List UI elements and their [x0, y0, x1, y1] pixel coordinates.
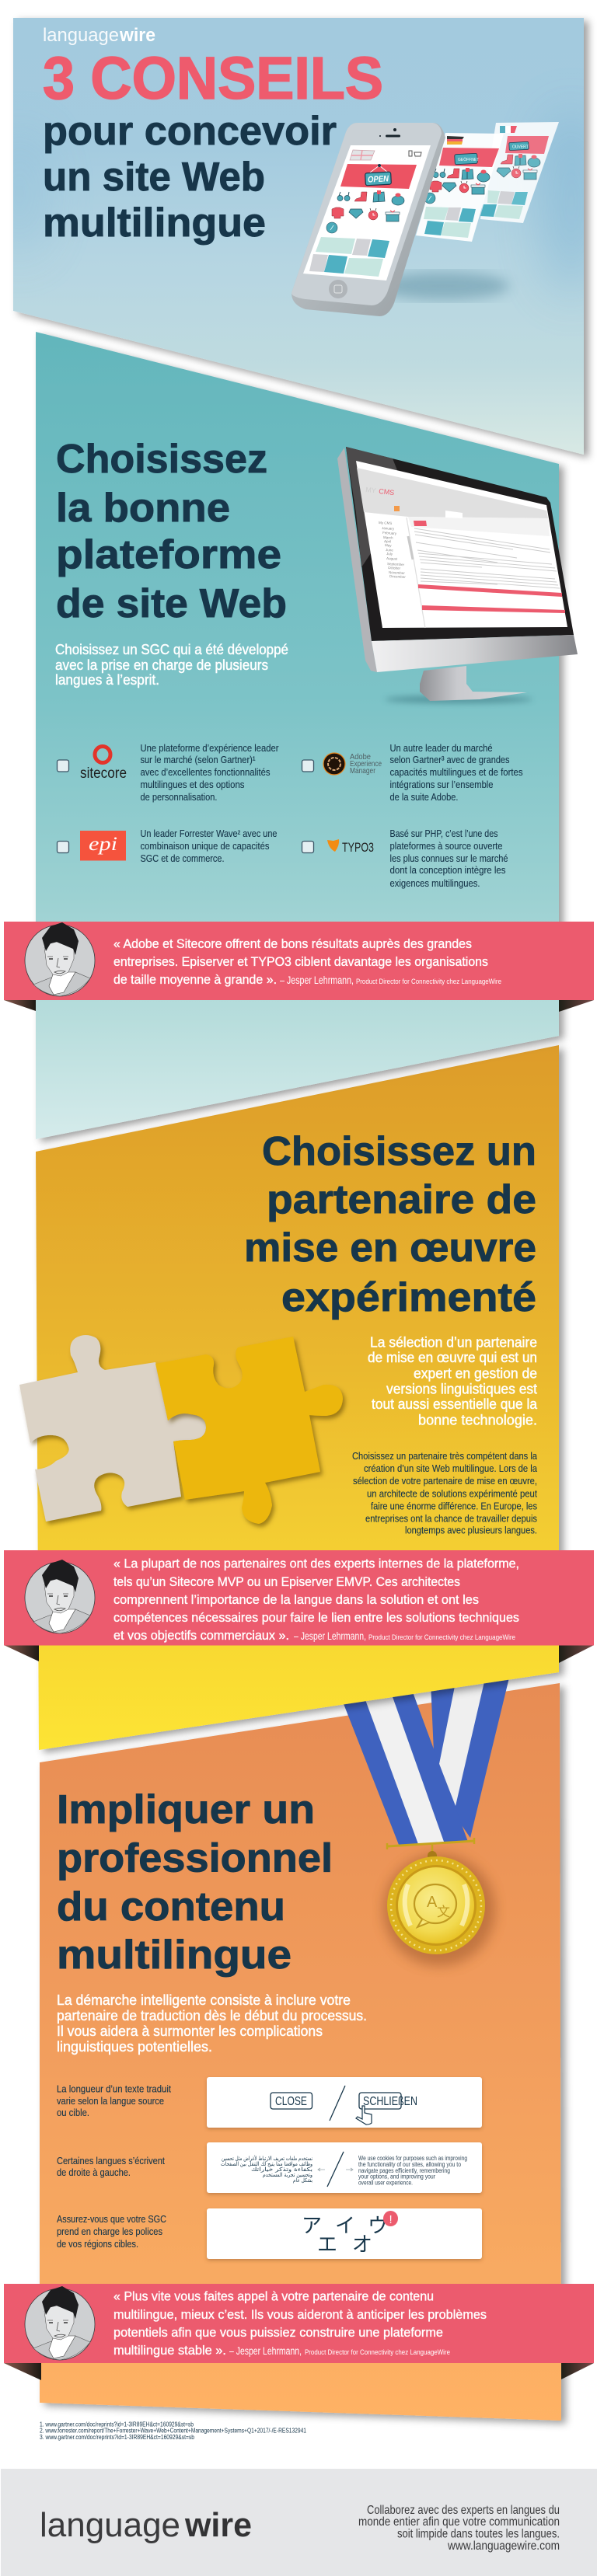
quote text: Product Director for Connectivity chez LanguageWire — [305, 2348, 450, 2357]
ribbon folds — [4, 2363, 594, 2380]
quote text: entreprises. Episerver et TYPO3 ciblent davantage les organisations — [113, 955, 488, 969]
text: Episerver: Un leader Forrester Wave² avec une — [140, 828, 278, 839]
ribbon band — [4, 922, 594, 1000]
tip 1 heading: plateforme — [56, 532, 281, 577]
tip 1 intro text: Choisissez un SGC qui a été développé — [55, 642, 288, 657]
tip 3 intro text: Il vous aidera à surmonter les complications — [57, 2024, 323, 2039]
tip 2 body text: entreprises ont la chance de travailler depuis — [365, 1514, 537, 1525]
tip 2 body text: création d’un site Web multilingue. Lors de la — [364, 1463, 537, 1474]
tip 2 body text: Choisissez un partenaire très compétent dans la — [352, 1451, 537, 1462]
text: TYPO3 — [390, 828, 508, 889]
item: Sitecore — [58, 743, 278, 803]
card: katakana glyphs: ウ — [368, 2214, 388, 2237]
CMS sidebar tree: October — [388, 566, 401, 570]
footer logo: wire — [184, 2506, 252, 2544]
ribbon band — [4, 2284, 594, 2363]
card: close button comparison — [207, 2077, 482, 2128]
front phone — [292, 123, 445, 316]
tip 3 heading: Impliquer un — [57, 1787, 315, 1832]
checkbox — [58, 841, 68, 853]
header background — [13, 18, 584, 455]
text: font support — [57, 2214, 166, 2250]
tip 3 intro text: La démarche intelligente consiste à inclure votre — [57, 1992, 351, 2008]
quote text: potentiels afin que vous puissiez construire une plateforme — [113, 2326, 443, 2340]
item: TYPO3 — [302, 828, 508, 889]
text: Sitecore: avec d’excellentes fonctionnalités — [140, 767, 271, 778]
logo: Sitecore — [80, 746, 127, 782]
card: arabic and english text: your options, and improving your — [358, 2173, 435, 2180]
tip 2 intro text: de mise en œuvre qui est un — [368, 1350, 537, 1365]
quote text: multilingue, mieux c’est. Ils vous aideront à anticiper les problèmes — [113, 2308, 487, 2322]
logo: Adobe Experience Manager: Adobe — [350, 752, 371, 762]
footer text: soit limpide dans toutes les langues. — [397, 2528, 560, 2541]
tip 3 heading — [57, 1787, 333, 1978]
text: Adobe: de la suite Adobe. — [390, 792, 459, 803]
quote text — [113, 2290, 487, 2358]
text: right to left — [57, 2156, 165, 2178]
footer logo — [40, 2506, 252, 2544]
tip 2 intro text: tout aussi essentielle que la — [372, 1396, 538, 1412]
header tint — [0, 109, 597, 295]
card: katakana glyphs: イ — [335, 2214, 355, 2237]
rear page: French — [480, 122, 559, 223]
footnotes: 1. www.gartner.com/doc/reprints?id=1-3IR89EH&ct=160929&st=sb — [40, 2421, 194, 2428]
CMS sidebar tree: May — [385, 543, 392, 547]
text: Episerver: SGC et de commerce. — [140, 853, 224, 864]
subtitle: multilingue — [43, 200, 266, 246]
card: arabic and english text: وظائف مواقعنا مما يتيح لك التنقل بين الصفحات — [221, 2161, 312, 2167]
tip 3 background — [40, 1683, 561, 2421]
tip 3 heading: du contenu — [57, 1884, 285, 1929]
tip 2 body text — [352, 1451, 537, 1535]
subtitle — [43, 109, 337, 246]
card: arabic and english text — [207, 2142, 482, 2193]
CMS sidebar tree: January — [382, 526, 395, 531]
tip 3 heading: professionnel — [57, 1835, 333, 1881]
text: Episerver: combinaison unique de capacités — [140, 841, 269, 852]
tip 2 intro text: La sélection d’un partenaire — [370, 1335, 537, 1351]
text: Adobe: capacités multilingues et de fortes — [390, 767, 522, 778]
quote text: Product Director for Connectivity chez LanguageWire — [368, 1633, 515, 1642]
ribbon: quote 3 — [4, 2284, 594, 2380]
icon: warning badge — [383, 2211, 398, 2226]
text: font support: prend en charge les polices — [57, 2226, 162, 2237]
portrait: Jesper Lehrmann — [25, 1560, 95, 1633]
quote text — [113, 1557, 519, 1643]
tip 2 body text: longtemps avec plusieurs langues. — [405, 1525, 537, 1535]
tip 1 heading: Choisissez — [56, 437, 267, 482]
CMS sidebar tree: My CMS — [379, 521, 392, 525]
panel: tip 1, choose the right platform — [36, 332, 578, 1139]
text: Sitecore: de personnalisation. — [140, 792, 218, 803]
ribbon band — [4, 1550, 594, 1646]
logo: TYPO3 — [327, 839, 374, 855]
card: close button comparison: SCHLIEßEN — [363, 2095, 417, 2108]
tip 1 background — [36, 332, 559, 1139]
CMS sidebar tree: February — [382, 531, 397, 535]
text: TYPO3: plateformes à source ouverte — [390, 841, 503, 852]
text: Episerver — [140, 828, 278, 864]
panel: tip 3, involve a multilingual content professional — [40, 1675, 561, 2421]
text: right to left: Certaines langues s’écrivent — [57, 2156, 165, 2166]
card: arabic and english text: We use cookies for purposes such as improving — [358, 2155, 467, 2162]
icon: medal with ribbon: A — [427, 1894, 438, 1911]
tip 1 heading — [56, 437, 287, 626]
tip 3 intro text: linguistiques potentielles. — [57, 2039, 212, 2055]
card: arabic and english text: نستخدم ملفات تعريف الارتباط لأغراض مثل تحسين — [222, 2155, 312, 2162]
subtitle: un site Web — [43, 155, 265, 200]
footer text — [358, 2504, 560, 2553]
text: length varies: varie selon la langue source — [57, 2096, 164, 2107]
CMS sidebar tree: June — [386, 548, 393, 552]
tip 1 intro text: langues à l’esprit. — [55, 672, 159, 688]
ribbon folds — [4, 1645, 594, 1663]
quote text: et vos objectifs commerciaux ». — [113, 1629, 289, 1643]
tip 2 heading: expérimenté — [281, 1275, 536, 1320]
quote text: Product Director for Connectivity chez LanguageWire — [356, 978, 501, 986]
card: katakana glyphs: ア — [302, 2214, 322, 2237]
text: length varies — [57, 2084, 171, 2118]
text: right to left: de droite à gauche. — [57, 2167, 131, 2178]
icon: warning badge: ! — [389, 2213, 393, 2226]
CMS sidebar tree: December — [389, 574, 406, 579]
quote text: multilingue stable ». — [113, 2344, 226, 2358]
CMS sidebar tree: April — [384, 539, 391, 543]
card: arabic and english text: overall user experience. — [358, 2179, 413, 2187]
footer logo: language — [40, 2506, 180, 2544]
tip 1 heading: la bonne — [56, 486, 230, 531]
text: Adobe: selon Gartner³ avec de grandes — [390, 755, 510, 765]
checkbox — [302, 760, 314, 772]
quote text: compétences nécessaires pour faire le lien entre les solutions techniques — [113, 1611, 519, 1625]
icon: medal with ribbon — [341, 1675, 510, 1966]
tip 2 intro text — [368, 1335, 538, 1428]
logo: Adobe Experience Manager: Experience — [350, 759, 382, 769]
quote text — [113, 937, 501, 987]
panel: tip 2, choose an implementation partner — [19, 1045, 559, 1750]
quote text: « Adobe et Sitecore offrent de bons résultats auprès des grandes — [113, 937, 472, 951]
CMS sidebar tree: August — [386, 556, 398, 561]
footnotes: 2. www.forrester.com/report/The+Forrester+Wave+Web+Content+Management+Systems+Q1+2017/-/E-RES132941 — [40, 2428, 306, 2434]
quote text: « La plupart de nos partenaires ont des experts internes de la plateforme, — [113, 1557, 519, 1571]
footer text: www.languagewire.com — [447, 2539, 560, 2553]
tip 2 heading: partenaire de — [267, 1177, 536, 1222]
footer text: monde entier afin que votre communication — [358, 2515, 560, 2529]
footnotes: 3. www.gartner.com/doc/reprints?id=1-3IR89EH&ct=160929&st=sb — [40, 2434, 194, 2441]
tip 3 heading: multilingue — [57, 1933, 292, 1978]
icon: puzzle pieces — [19, 1335, 343, 1524]
quote text: – Jesper Lehrmann, — [280, 974, 354, 986]
text: Sitecore: sur le marché (selon Gartner)¹ — [140, 755, 255, 765]
tip 2 intro text: versions linguistiques est — [386, 1382, 537, 1397]
tip 2 intro text: bonne technologie. — [418, 1413, 537, 1428]
quote text: de taille moyenne à grande ». — [113, 973, 277, 987]
logo: Adobe Experience Manager: Manager — [350, 766, 375, 776]
tip 2 heading — [244, 1129, 536, 1320]
text: TYPO3: les plus connues sur le marché — [390, 853, 508, 864]
logo: language — [43, 25, 119, 46]
text: font support: Assurez-vous que votre SGC — [57, 2214, 166, 2225]
tip 2 body text: un architecte de solutions expérimenté peut — [367, 1489, 537, 1500]
footer text: Collaborez avec des experts en langues du — [367, 2504, 560, 2517]
logo: Adobe Experience Manager — [323, 752, 382, 776]
card: arabic and english text: بشكل عام — [293, 2177, 312, 2184]
item: Episerver — [58, 828, 278, 864]
text: length varies: ou cible. — [57, 2107, 89, 2118]
item: Adobe Experience Manager — [302, 743, 522, 803]
quote text: comprennent l’importance de la langue dans la solution et ont les — [113, 1593, 479, 1607]
card: close button comparison: CLOSE — [275, 2095, 307, 2108]
logo: wire — [119, 25, 155, 46]
quote text: – Jesper Lehrmann, — [229, 2345, 302, 2357]
item: translated text length — [57, 2077, 482, 2128]
ribbon: quote 2 — [4, 1550, 594, 1663]
tip 2 intro text: expert en gestion de — [414, 1366, 537, 1382]
tip 3 intro text — [57, 1992, 367, 2055]
footer background — [1, 2469, 597, 2576]
footer — [1, 2469, 597, 2576]
ribbon: quote 1 — [4, 922, 594, 1012]
card: katakana glyphs: エ — [317, 2233, 337, 2256]
text: TYPO3: exigences multilingues. — [390, 878, 480, 889]
CMS sidebar tree: September — [387, 562, 405, 566]
card: arabic and english text: بكفاءة وتذكر خياراتك — [251, 2166, 312, 2173]
text: Adobe — [390, 743, 522, 803]
card: arabic and english text: the functionality of our sites, allowing you to — [358, 2161, 461, 2168]
logo: TYPO3: TYPO3 — [342, 840, 374, 855]
quote text: – Jesper Lehrmann, — [294, 1630, 366, 1642]
checkbox — [58, 760, 68, 772]
icon: desktop monitor with CMS — [337, 447, 578, 703]
logo: Episerver: epi — [89, 834, 117, 855]
tip 2 background — [36, 1045, 559, 1750]
icon: hand cursor — [356, 2106, 372, 2125]
text: TYPO3: Basé sur PHP, c’est l’une des — [390, 828, 498, 839]
tip 2 heading: mise en œuvre — [244, 1225, 536, 1271]
rear page: French: OUVERT — [512, 145, 529, 149]
tip 1 intro text — [55, 642, 288, 688]
text: length varies: La longueur d’un texte traduit — [57, 2084, 171, 2095]
text: Adobe: Un autre leader du marché — [390, 743, 493, 754]
text: font support: de vos régions cibles. — [57, 2239, 138, 2250]
tip 2 heading: Choisissez un — [262, 1129, 536, 1174]
card: arabic and english text: وتحسين تجربة المستخدم — [263, 2172, 312, 2178]
item: fonts for target regions — [57, 2208, 482, 2259]
text: Sitecore: multilingues et des options — [140, 779, 244, 790]
subtitle: pour concevoir — [43, 109, 337, 154]
CMS sidebar tree: November — [389, 570, 405, 575]
CMS sidebar tree: July — [386, 552, 393, 556]
card: arabic and english text: navigate pages efficiently, remembering — [358, 2167, 450, 2174]
tip 3 intro text: partenaire de traduction dès le début du processus. — [57, 2008, 367, 2024]
CMS label — [365, 486, 395, 497]
CMS sidebar tree — [379, 521, 406, 579]
card: katakana glyphs: オ — [352, 2233, 372, 2256]
text: Adobe: intégrations sur l’ensemble — [390, 779, 494, 790]
text: TYPO3: dont la conception intègre les — [390, 865, 505, 876]
CMS sidebar tree: March — [383, 535, 393, 540]
middle page: German: GEÖFFNET — [458, 157, 479, 162]
title: 3 CONSEILS — [43, 45, 383, 112]
logo: Sitecore: sitecore — [80, 765, 127, 782]
footnotes — [40, 2421, 306, 2441]
portrait: Jesper Lehrmann — [25, 2286, 95, 2360]
portrait: Jesper Lehrmann — [25, 922, 95, 996]
tip 2 body text: faire une énorme différence. En Europe, les — [371, 1501, 537, 1512]
middle page: German — [416, 133, 504, 242]
logo — [43, 25, 155, 46]
logo: Episerver — [80, 831, 126, 861]
panel: header — [0, 18, 597, 455]
icon: medal with ribbon: 文 — [437, 1901, 450, 1920]
card: katakana glyphs — [207, 2208, 482, 2259]
sign text: OPEN — [368, 174, 389, 185]
icon: phones with translated shop pages — [292, 122, 559, 316]
text: Sitecore: Une plateforme d’expérience leader — [140, 743, 278, 754]
item: right-to-left languages — [57, 2142, 482, 2193]
text: Sitecore — [140, 743, 278, 803]
tip 1 intro text: avec la prise en charge de plusieurs — [55, 657, 268, 673]
quote text: tels qu’un Sitecore MVP ou un Episerver EMVP. Ces architectes — [113, 1575, 460, 1589]
checkbox — [302, 841, 314, 853]
CMS label: MY — [365, 486, 376, 494]
quote text: « Plus vite vous faites appel à votre partenaire de contenu — [113, 2290, 434, 2304]
tip 1 heading: de site Web — [56, 581, 287, 626]
CMS label: CMS — [379, 487, 395, 497]
tip 2 body text: sélection de votre partenaire de mise en œuvre, — [353, 1476, 537, 1487]
ribbon folds — [4, 1000, 594, 1012]
